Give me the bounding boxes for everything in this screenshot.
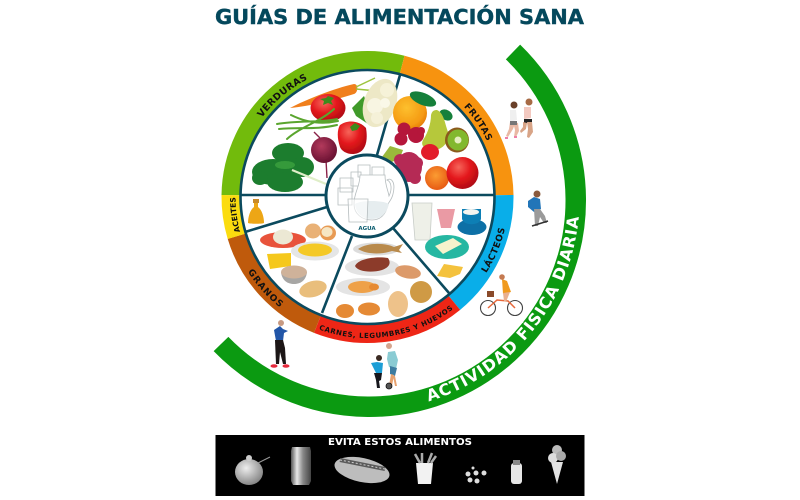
- red pepper: [338, 121, 367, 154]
- label: verduras: VERDURAS: [256, 74, 306, 116]
- ring: aceites: [231, 195, 237, 236]
- foods: verduras: [252, 74, 404, 192]
- label: agua: AGUA: [358, 226, 376, 232]
- ring: carnes: [318, 302, 454, 333]
- peach: [425, 166, 449, 190]
- onions: [305, 224, 336, 240]
- icon: fries: [415, 453, 436, 484]
- milk glass: [412, 203, 432, 240]
- cheese slices: [437, 264, 463, 278]
- corn: [267, 253, 291, 269]
- ring: verduras: [231, 61, 402, 195]
- icon: sugar bowl: [235, 455, 270, 485]
- ring: frutas: [402, 65, 504, 195]
- man: [386, 343, 398, 386]
- legumes: [336, 302, 380, 318]
- ball: [386, 383, 392, 389]
- title: GUÍAS DE ALIMENTACIÓN SANA: [215, 5, 585, 29]
- label: lácteos: LÁCTEOS: [481, 228, 504, 272]
- foods: lácteos: [412, 203, 486, 278]
- person: skateboarder: [528, 190, 548, 226]
- icon: ice cream: [548, 445, 566, 484]
- beet: [311, 132, 337, 178]
- grapes: [394, 152, 423, 184]
- cup and saucer: [458, 209, 486, 235]
- orange: [393, 96, 427, 130]
- chickpeas: [410, 281, 432, 303]
- icon: candies: [466, 466, 486, 484]
- icon: can: [291, 447, 311, 485]
- icon: jug and glasses: [338, 165, 394, 222]
- pear: [422, 110, 448, 150]
- plate: [222, 51, 514, 343]
- fish plate: [353, 242, 403, 256]
- egg: [388, 291, 408, 317]
- grape leaf: [382, 146, 403, 162]
- runner 1: [505, 102, 519, 139]
- bowl of grain: [281, 266, 307, 284]
- ring: lácteos: [454, 195, 504, 302]
- boy: [371, 355, 383, 388]
- bread: [297, 278, 329, 300]
- green beans: [277, 109, 338, 139]
- label: carnes: CARNES, LEGUMBRES Y HUEVOS: [320, 306, 452, 338]
- strawberry: [421, 144, 439, 160]
- red plate with rice: [260, 230, 306, 248]
- chard: [252, 143, 326, 192]
- panel: evita estos alimentos: [216, 435, 584, 496]
- person: cyclist: [480, 274, 522, 316]
- kiwi: [445, 128, 469, 152]
- people: soccer players: [371, 343, 398, 389]
- beans: [394, 263, 422, 281]
- panel heading: EVITA ESTOS ALIMENTOS: [328, 437, 472, 448]
- label: granos: GRANOS: [249, 269, 284, 306]
- foods: frutas: [382, 88, 478, 190]
- steak plate: [345, 257, 399, 276]
- person: walker: [270, 320, 290, 368]
- icon: salt shaker: [511, 460, 522, 484]
- plate dividers: [240, 70, 494, 324]
- foods: carnes, legumbres y huevos: [336, 242, 432, 318]
- icon: hot dog: [332, 452, 392, 488]
- people: runners: [505, 98, 533, 139]
- label: aceites: ACEITES: [230, 198, 240, 232]
- ring: granos: [237, 236, 318, 324]
- center water circle: [326, 155, 408, 237]
- yogurt: [437, 209, 455, 228]
- carrot: [290, 78, 377, 108]
- runner 2: [520, 98, 533, 138]
- pasta plate: [291, 242, 339, 260]
- cherries: [394, 122, 425, 146]
- foods: granos: [260, 224, 339, 300]
- cauliflower: [352, 74, 404, 132]
- tomato: [310, 94, 346, 122]
- labels on ring: [230, 74, 504, 338]
- leaves: [408, 88, 455, 123]
- apple: [446, 157, 478, 189]
- arc label: ACTIVIDAD FÍSICA DIARIA: [428, 217, 579, 402]
- cheese plate: [425, 235, 469, 259]
- label: frutas: FRUTAS: [464, 102, 492, 140]
- chicken plate: [336, 278, 390, 296]
- food: aceite bottle: [248, 199, 264, 224]
